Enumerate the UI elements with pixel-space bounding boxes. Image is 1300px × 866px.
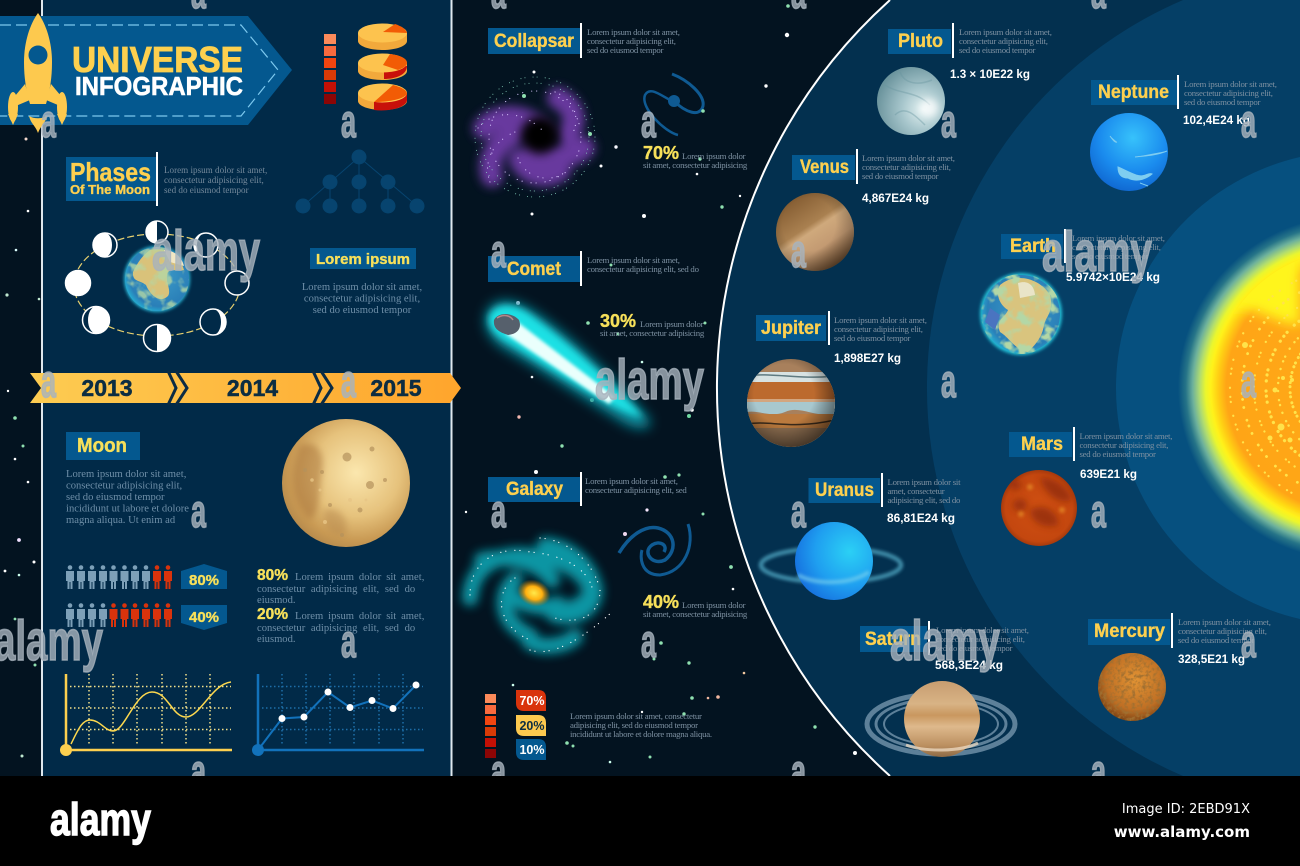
watermarks: a	[1091, 485, 1106, 537]
stat text: 80 percent: consectetur adipisicing elit, sed do	[257, 584, 415, 595]
illustration: comet	[485, 301, 650, 428]
watermarks: a	[41, 95, 56, 147]
planet: earth: Earth	[1010, 236, 1056, 257]
heading: moon	[66, 432, 140, 460]
text: Lorem ipsum dolor sit amet,	[936, 625, 1029, 635]
heading: collapsar	[488, 23, 582, 58]
stat text: 20 percent	[257, 606, 424, 645]
sphere	[1001, 470, 1077, 546]
stat: 40 percent: Lorem ipsum dolor	[682, 600, 746, 610]
diagram: moon phases orbit	[66, 221, 249, 352]
earth	[124, 246, 190, 312]
text: lorem ipsum description: Lorem ipsum dolor sit amet,	[302, 282, 422, 293]
text: phases description: sed do eiusmod tempor	[164, 185, 249, 195]
badge: 80 percent: 80%	[189, 572, 219, 589]
stat: 40 percent: 40%	[643, 592, 679, 612]
planet: saturn	[860, 621, 1029, 757]
text: sed do eiusmod tempor	[834, 333, 911, 343]
watermarks: a	[1091, 745, 1106, 797]
text: Lorem ipsum dolor sit	[888, 477, 961, 487]
text: moon description: magna aliqua. Ut enim ad	[66, 515, 176, 526]
watermarks: a	[1241, 615, 1256, 667]
stat text: 80 percent	[257, 567, 424, 606]
planet: venus	[776, 149, 955, 271]
stat text: 20 percent: consectetur adipisicing elit, sed do	[257, 623, 415, 634]
text: galaxy description: consectetur adipisicing elit, sed	[585, 485, 687, 495]
heading: phases of the moon: Of The Moon	[70, 182, 150, 197]
mass: 639E21 kg	[1080, 467, 1137, 481]
pictogram: people 80 percent	[66, 565, 172, 589]
heading: moon: Moon	[77, 435, 127, 457]
text: legend description: adipisicing elit, sed do eiusmod tempor	[570, 720, 698, 730]
text: consectetur adipisicing elit,	[959, 36, 1048, 46]
stat text: 20 percent: eiusmod.	[257, 634, 296, 645]
years: 2014	[227, 375, 278, 401]
text: Lorem ipsum dolor sit amet,	[1072, 233, 1165, 243]
years: 2013	[81, 375, 133, 401]
planet: jupiter	[747, 311, 927, 447]
text: Lorem ipsum dolor sit amet,	[1080, 431, 1172, 441]
watermarks: a	[341, 95, 356, 147]
text: sed do eiusmod tempor	[936, 643, 1013, 653]
image id: Image ID: 2EBD91X	[1122, 802, 1250, 817]
text: consectetur adipisicing elit,	[1072, 242, 1161, 252]
banner title: INFOGRAPHIC	[75, 71, 243, 101]
solar system boundary arc	[717, 0, 890, 776]
footer logo: alamy	[50, 794, 151, 845]
text: adipisicing elit, sed do	[888, 495, 961, 505]
text: sed do eiusmod tempor	[959, 45, 1036, 55]
stat: 70 percent	[643, 143, 748, 170]
illustration: moon	[282, 419, 410, 547]
legend: red colour scale	[324, 34, 336, 104]
stat text: 80 percent: eiusmod.	[257, 595, 296, 606]
phases	[66, 221, 249, 352]
line chart: yellow	[60, 674, 232, 756]
text: sed do eiusmod tempor	[1178, 635, 1255, 645]
watermarks: a	[941, 355, 956, 407]
illustration: spiral galaxy	[470, 538, 612, 652]
banner title	[72, 39, 243, 101]
text: moon description: consectetur adipisicing elit,	[66, 480, 182, 492]
planet: earth	[980, 229, 1165, 355]
text: legend description: Lorem ipsum dolor sit amet, consectetur	[570, 711, 702, 721]
pictogram: people 40 percent	[66, 603, 172, 627]
planet: uranus: Uranus	[815, 480, 874, 501]
sphere	[980, 273, 1062, 355]
text: galaxy description: Lorem ipsum dolor sit amet,	[585, 476, 678, 486]
text: consectetur adipisicing elit,	[1080, 440, 1168, 450]
mass: 102,4E24 kg	[1183, 113, 1250, 127]
stat text: 80 percent: 80%	[257, 567, 288, 584]
sphere with ring	[761, 522, 901, 600]
heading: phases of the moon	[66, 152, 158, 206]
sphere with rings	[867, 681, 1015, 757]
text: lorem ipsum description: consectetur adipisicing elit,	[304, 294, 420, 304]
watermarks: a	[41, 355, 56, 407]
text: Lorem ipsum dolor sit amet,	[834, 315, 927, 325]
text: Lorem ipsum dolor sit amet,	[1178, 617, 1271, 627]
solar system middle zone	[927, 0, 1300, 776]
watermarks: a	[641, 615, 656, 667]
text: sed do eiusmod tempor	[862, 171, 939, 181]
stat: 40 percent: sit amet, consectetur adipisicing	[643, 609, 748, 619]
stat: 70 percent: 70%	[643, 143, 679, 163]
legend: percentage badges	[516, 690, 546, 760]
mass: 1,898E27 kg	[834, 351, 901, 365]
text: comet description: Lorem ipsum dolor sit amet,	[587, 255, 680, 265]
watermarks: a	[791, 485, 806, 537]
mass: 328,5E21 kg	[1178, 652, 1245, 666]
stars	[4, 4, 857, 763]
text: sed do eiusmod tempor	[1184, 97, 1261, 107]
text: legend description: incididunt ut labore et dolore magna aliqua.	[570, 729, 712, 739]
text: sed do eiusmod tempor	[1080, 449, 1156, 459]
line chart: blue	[252, 674, 424, 756]
watermarks: a	[341, 615, 356, 667]
watermarks: a	[791, 745, 806, 797]
legend: percentage badges: 10%	[519, 743, 545, 757]
text: moon description: incididunt ut labore et dolore	[66, 504, 189, 514]
stat text: 20 percent: 20%	[257, 606, 288, 623]
left content panel	[42, 0, 451, 776]
planet: jupiter: Jupiter	[761, 318, 822, 339]
heading: galaxy	[488, 472, 582, 506]
watermarks: a	[791, 225, 806, 277]
text: moon description: sed do eiusmod tempor	[66, 492, 165, 503]
text: consectetur adipisicing elit,	[1184, 88, 1273, 98]
watermarks: alamy	[595, 348, 704, 412]
mass: 5.9742×10E24 kg	[1066, 270, 1160, 284]
watermarks: alamy	[152, 219, 260, 283]
text: consectetur adipisicing elit,	[862, 162, 951, 172]
sphere	[1098, 653, 1166, 721]
text: phases description: Lorem ipsum dolor sit amet,	[164, 165, 267, 175]
text: lorem ipsum description: sed do eiusmod tempor	[313, 305, 412, 316]
watermarks: a	[1241, 95, 1256, 147]
mass: 1.3 × 10E22 kg	[950, 67, 1030, 81]
text: collapsar description: Lorem ipsum dolor sit amet,	[587, 27, 680, 37]
planet: saturn: Saturn	[865, 629, 921, 650]
illustration: sun	[1178, 223, 1300, 553]
text: Lorem ipsum dolor sit amet,	[862, 153, 955, 163]
stat: 30 percent: 30%	[600, 311, 636, 331]
years: 2015	[370, 375, 422, 401]
watermarks: a	[491, 225, 506, 277]
heading: comet	[488, 251, 582, 286]
stat: 30 percent: Lorem ipsum dolor	[640, 319, 704, 329]
watermarks: a	[1241, 355, 1256, 407]
text: collapsar description: sed do eiusmod tempor	[587, 45, 664, 55]
badge: 80 percent	[181, 564, 227, 589]
sphere	[776, 193, 854, 271]
header banner	[0, 16, 292, 125]
stat: 70 percent: Lorem ipsum dolor	[682, 151, 746, 161]
watermarks: a	[491, 745, 506, 797]
watermarks: a	[641, 95, 656, 147]
planet: pluto: Pluto	[898, 31, 943, 52]
planet: mars	[1001, 427, 1172, 546]
text: consectetur adipisicing elit,	[1178, 626, 1267, 636]
planet: pluto	[877, 23, 1052, 135]
stat: 40 percent	[643, 592, 748, 619]
text: phases description: consectetur adipisicing elit,	[164, 175, 264, 185]
watermarks: alamy	[1042, 220, 1152, 284]
planet: neptune: Neptune	[1098, 82, 1169, 103]
planet: venus: Venus	[800, 157, 849, 178]
sphere	[1090, 113, 1168, 191]
stat text: 20 percent: Lorem ipsum dolor sit amet,	[295, 611, 424, 622]
planet: uranus	[761, 473, 961, 600]
icon: rocket	[8, 13, 67, 133]
heading: galaxy: Galaxy	[506, 479, 563, 500]
text: sed do eiusmod tempor	[1072, 251, 1149, 261]
legend: percentage badges: 70%	[519, 694, 545, 708]
website: www.alamy.com	[1114, 823, 1250, 841]
icon: network tree	[296, 150, 424, 213]
watermarks: a	[341, 355, 356, 407]
text: collapsar description: consectetur adipisicing elit,	[587, 36, 676, 46]
stat text: 80 percent: Lorem ipsum dolor sit amet,	[295, 572, 424, 583]
planet: mercury: Mercury	[1094, 621, 1165, 642]
text: amet, consectetur	[888, 486, 945, 496]
text: Lorem ipsum dolor sit amet,	[959, 27, 1052, 37]
text: comet description: consectetur adipisicing elit, sed do	[587, 264, 700, 274]
banner title: UNIVERSE	[72, 39, 243, 80]
illustration: collapsar black hole	[475, 77, 595, 197]
mass: 4,867E24 kg	[862, 191, 929, 205]
planet: mars: Mars	[1021, 434, 1063, 455]
legend: bottom colour scale	[485, 694, 496, 758]
watermarks: a	[191, 485, 206, 537]
sphere	[877, 67, 945, 135]
solar system inner zone	[1116, 157, 1300, 619]
watermarks: a	[191, 745, 206, 797]
years	[81, 375, 422, 401]
text: Lorem ipsum dolor sit amet,	[1184, 79, 1277, 89]
timeline ribbon	[30, 371, 461, 405]
heading: comet: Comet	[507, 259, 562, 280]
planet: mercury	[1088, 613, 1271, 721]
badge: 40 percent	[181, 605, 227, 630]
panel border lines	[41, 0, 452, 776]
sphere	[747, 359, 835, 447]
sub-heading: lorem ipsum: Lorem ipsum	[316, 251, 410, 268]
mass: 568,3E24 kg	[935, 658, 1003, 672]
stat: 70 percent: sit amet, consectetur adipisicing	[643, 160, 748, 170]
pie charts	[358, 24, 407, 110]
text: moon description: Lorem ipsum dolor sit amet,	[66, 469, 186, 480]
watermarks: a	[491, 485, 506, 537]
footer bar	[0, 776, 1300, 866]
mass: 86,81E24 kg	[887, 511, 955, 525]
icon: orbit	[644, 74, 705, 135]
heading: collapsar: Collapsar	[494, 31, 575, 52]
stat: 30 percent	[600, 311, 705, 338]
icon: spiral	[619, 524, 690, 575]
legend: percentage badges: 20%	[519, 719, 545, 733]
text: consectetur adipisicing elit,	[936, 634, 1025, 644]
badge: 40 percent: 40%	[189, 609, 219, 626]
watermarks: alamy	[890, 609, 1000, 673]
heading: phases of the moon: Phases	[70, 157, 151, 187]
watermarks: a	[941, 95, 956, 147]
stat: 30 percent: sit amet, consectetur adipisicing	[600, 328, 705, 338]
planet: neptune	[1090, 75, 1277, 191]
text: consectetur adipisicing elit,	[834, 324, 923, 334]
solar system outer zone	[717, 0, 1300, 776]
